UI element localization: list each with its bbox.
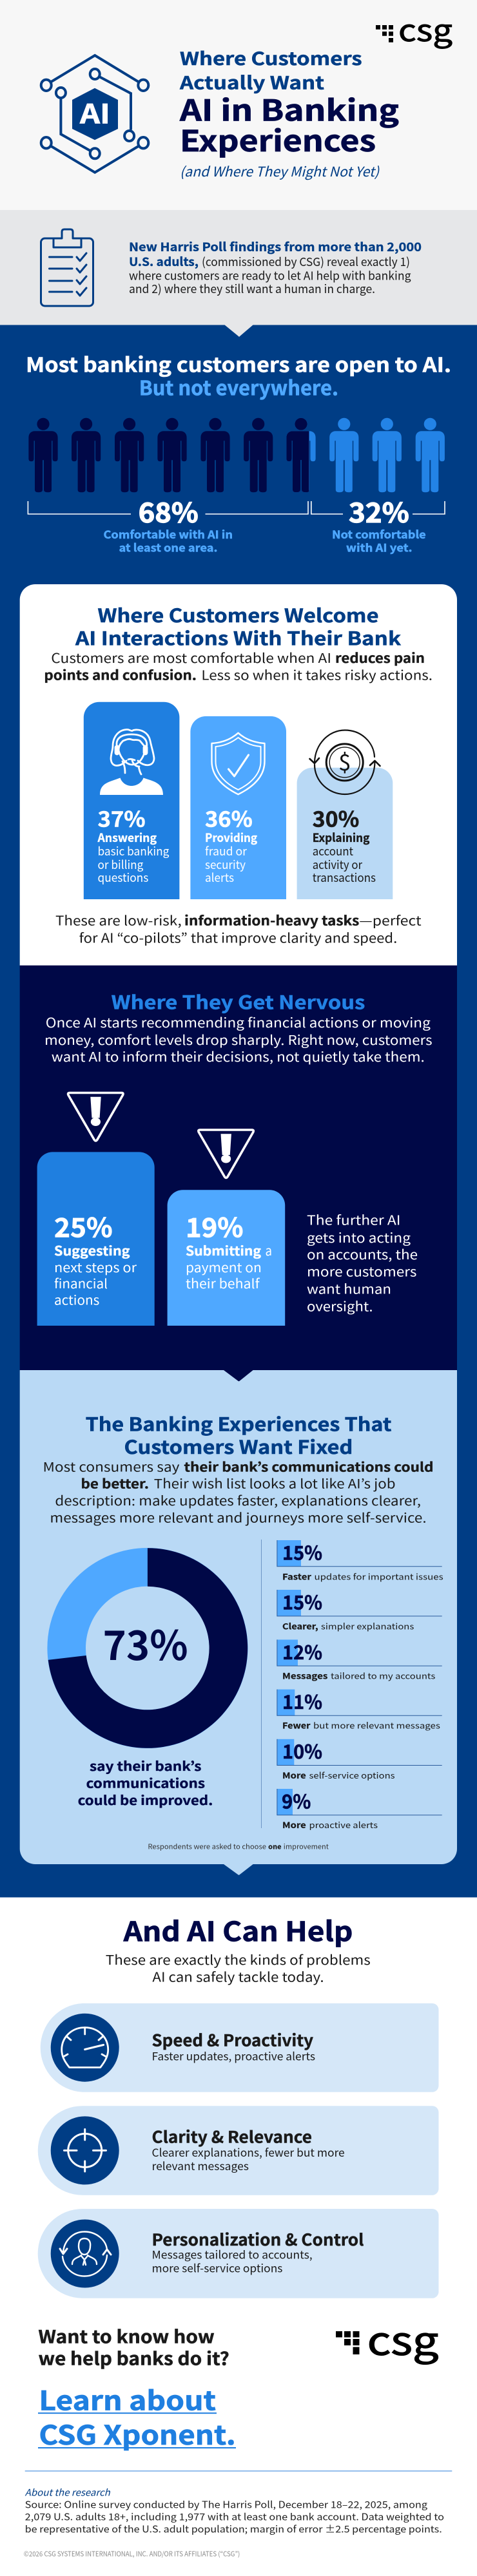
text: nervous intro: money, comfort levels drop sharply. Right now, customers: [44, 1029, 433, 1049]
card: personalization and control: Messages tailored to accounts,: [152, 2246, 313, 2262]
text: further AI: [307, 1209, 418, 1315]
text: fixed intro: their bank’s communications could: [184, 1456, 433, 1475]
text: low-risk tasks: —perfect: [359, 910, 422, 930]
bar: tailored messages: Messages: [282, 1670, 327, 1681]
text: about the research: [25, 2485, 444, 2536]
title: Where Customers: [180, 45, 362, 71]
text: 37 percent: 37%: [98, 802, 146, 833]
bracket: 68 percent: 68%: [139, 491, 199, 531]
text: further AI: oversight.: [307, 1295, 373, 1315]
bar: self-service: [277, 1736, 442, 1781]
text: want to know: we help banks do it?: [39, 2345, 229, 2371]
heading: open to AI: [26, 348, 451, 401]
card: clarity and relevance: Clarity & Relevance: [152, 2125, 312, 2148]
text: 30 percent: activity or: [313, 856, 363, 873]
arrow: bottom notch: [224, 1864, 253, 1875]
bar: faster updates: 15%: [282, 1537, 322, 1565]
card: 25 percent suggesting: next steps or: [54, 1257, 137, 1276]
text: want to know: Want to know how: [39, 2322, 215, 2348]
bar: clearer explanations: Clearer,: [282, 1619, 318, 1632]
text: nervous intro: want AI to inform their decisions, not quietly take them.: [52, 1046, 425, 1065]
bar: fewer messages: but more relevant messages: [313, 1719, 440, 1732]
text: low-risk tasks: These are low-risk,: [55, 910, 182, 930]
text: welcome intro: reduces pain: [335, 647, 425, 667]
card: 19 percent submitting: their behalf: [186, 1274, 260, 1292]
footnote: respondents: improvement: [284, 1842, 329, 1851]
title: Experiences: [180, 118, 376, 160]
panel: experiences customers want fixed: [20, 1370, 457, 1875]
icon: speedometer: [62, 2028, 108, 2068]
heading: fixed: The Banking Experiences That: [86, 1409, 391, 1436]
text: further AI: more customers: [307, 1261, 416, 1281]
card: 25 percent suggesting: financial: [54, 1274, 108, 1292]
heading: fixed: [86, 1409, 391, 1460]
arrow: top notch: [224, 1370, 253, 1381]
bar: proactive alerts: More: [282, 1818, 306, 1831]
section: and AI can help: [38, 1911, 439, 2298]
bracket: 32 percent: [311, 491, 445, 555]
footnote: respondents: [148, 1842, 329, 1851]
link: learn about CSG Xponent: Learn about: [39, 2380, 216, 2418]
text: 36 percent: alerts: [205, 869, 234, 886]
icon: clipboard checklist: [41, 229, 93, 306]
text: fixed intro: be better.: [81, 1473, 149, 1492]
title: [179, 45, 399, 181]
icon: warning triangle two: [199, 1130, 253, 1178]
bar: faster updates: [277, 1537, 443, 1582]
icon: shield check: [211, 733, 264, 794]
icon: AI chip hexagon: AI: [79, 93, 110, 131]
bar: fewer messages: 11%: [282, 1686, 322, 1715]
logo: CSG top: csg: [398, 6, 453, 50]
icon: headset agent: [100, 729, 163, 795]
footnote: respondents: Respondents were asked to choose: [148, 1842, 266, 1851]
text: AI can help intro: [106, 1949, 371, 1986]
card: 30 percent explaining: [297, 730, 393, 899]
chart: 73 percent donut: 73%: [103, 1614, 188, 1672]
text: fixed intro: [43, 1456, 433, 1526]
text: intro: U.S. adults,: [129, 253, 199, 270]
card: 25 percent suggesting: Suggesting: [54, 1241, 130, 1259]
card: personalization and control: [38, 2209, 439, 2298]
text: intro: where customers are ready to let AI help with banking: [129, 267, 411, 283]
text: 30 percent: 30%: [313, 802, 359, 833]
logo: CSG bottom: csg: [367, 2311, 438, 2367]
text: intro: (commissioned by CSG) reveal exactly 1): [202, 253, 410, 270]
heading: welcome: [75, 601, 402, 651]
bar: tailored messages: tailored to my accounts: [331, 1670, 435, 1681]
bar: self-service: More: [282, 1769, 306, 1781]
heading: welcome: AI Interactions With Their Bank: [75, 624, 402, 651]
card: speed and proactivity: [41, 2003, 438, 2092]
icon: AI chip hexagon: [41, 55, 148, 173]
icon: target: [64, 2130, 106, 2171]
text: fixed intro: messages more relevant and journeys more self-service.: [50, 1507, 427, 1526]
text: fixed intro: description: make updates faster, explanations clearer,: [55, 1491, 421, 1509]
text: low-risk tasks: [55, 910, 422, 946]
text: welcome intro: [44, 647, 433, 684]
text: fixed intro: Their wish list looks a lot like AI’s job: [154, 1473, 396, 1492]
card: speed and proactivity: Faster updates, proactive alerts: [152, 2047, 315, 2063]
text: further AI: gets into acting: [307, 1227, 411, 1246]
heading: AI can help: And AI Can Help: [123, 1911, 353, 1949]
card: 19 percent submitting: payment on: [186, 1257, 262, 1276]
bar chart: improvements: [277, 1537, 443, 1831]
text: copyright: ©2026 CSG SYSTEMS INTERNATIONAL, INC. AND/OR ITS AFFILIATES (“CSG”): [24, 2549, 240, 2559]
card: speed and proactivity: Speed & Proactivity: [152, 2028, 314, 2052]
card: clarity and relevance: [38, 2106, 439, 2195]
call to action: [38, 2311, 438, 2452]
card: 36 percent providing: [190, 716, 286, 899]
text: 37 percent: questions: [98, 869, 148, 886]
bar: self-service: 10%: [282, 1736, 322, 1764]
text: welcome intro: Customers are most comfortable when AI: [51, 647, 331, 667]
card: clarity and relevance: relevant messages: [152, 2157, 249, 2173]
bar: clearer explanations: [277, 1587, 442, 1632]
text: nervous intro: Once AI starts recommending financial actions or moving: [46, 1012, 431, 1031]
bar: tailored messages: [277, 1637, 442, 1681]
text: 36 percent: [205, 802, 257, 886]
text: intro: and 2) where they still want a human in charge.: [129, 280, 375, 297]
text: further AI: on accounts, the: [307, 1244, 418, 1263]
text: about the research: Source: Online survey conducted by The Harris Poll, December 18–22, 2025, among: [25, 2497, 428, 2511]
text: AI can help intro: AI can safely tackle today.: [152, 1967, 324, 1986]
card: 19 percent submitting: Submitting: [186, 1241, 261, 1259]
bracket: 68 percent: at least one area.: [119, 539, 217, 555]
text: donut caption: could be improved.: [78, 1790, 213, 1809]
text: want to know: [39, 2322, 229, 2371]
heading: open to AI: But not everywhere.: [139, 372, 338, 401]
logo: CSG bottom: [336, 2311, 438, 2367]
text: 37 percent: Answering: [97, 829, 157, 846]
heading: welcome: Where Customers Welcome: [98, 601, 379, 628]
logo: CSG top: [376, 6, 453, 50]
bar: fewer messages: Fewer: [282, 1719, 311, 1732]
text: 36 percent: Providing: [205, 829, 257, 846]
text: welcome intro: Less so when it takes risky actions.: [201, 665, 433, 684]
card: 25 percent suggesting: [37, 1152, 155, 1326]
text: intro: New Harris Poll findings from more than 2,000: [129, 238, 422, 255]
text: 30 percent: [313, 802, 376, 886]
text: further AI: want human: [307, 1278, 391, 1297]
text: low-risk tasks: information-heavy tasks: [184, 910, 359, 930]
text: further AI: The further AI: [307, 1209, 401, 1228]
link: learn about CSG Xponent: CSG Xponent.: [39, 2414, 236, 2452]
card: 19 percent submitting: [168, 1190, 285, 1326]
title: (and Where They Might Not Yet): [180, 162, 380, 181]
chart: people pictogram: [28, 418, 445, 492]
card: 19 percent submitting: 19%: [186, 1206, 244, 1245]
icon: dollar cycle: [309, 730, 380, 794]
card: 19 percent submitting: a: [266, 1241, 272, 1259]
card: clarity and relevance: Clearer explanations, fewer but more: [152, 2144, 345, 2160]
bracket: 32 percent: with AI yet.: [346, 539, 413, 555]
bracket: 32 percent: 32%: [349, 491, 409, 531]
text: donut caption: [78, 1756, 213, 1809]
card: 25 percent suggesting: actions: [54, 1290, 99, 1308]
main blue section: [0, 325, 477, 1898]
bar: clearer explanations: simpler explanations: [321, 1619, 414, 1632]
panel: where they get nervous: [20, 966, 457, 1371]
text: about the research: be representative of the U.S. adult population; margin of error ±2.5 percentage points.: [25, 2523, 442, 2536]
link: learn about CSG Xponent: [38, 2380, 236, 2452]
text: fixed intro: Most consumers say: [43, 1456, 180, 1475]
bar: self-service: self-service options: [309, 1769, 394, 1781]
card: personalization and control: Personalization & Control: [152, 2228, 364, 2251]
card: personalization and control: more self-service options: [152, 2260, 282, 2276]
text: 36 percent: security: [205, 856, 246, 873]
heading: nervous: Where They Get Nervous: [112, 988, 365, 1015]
text: donut caption: say their bank’s: [90, 1756, 202, 1775]
title: Actually Want: [179, 69, 324, 95]
bracket: 32 percent: Not comfortable: [332, 526, 426, 542]
title: AI in Banking: [179, 88, 399, 129]
text: 36 percent: fraud or: [205, 843, 248, 859]
icon: person cycle: [60, 2231, 111, 2276]
text: low-risk tasks: for AI “co-pilots” that improve clarity and speed.: [79, 927, 397, 946]
text: donut caption: communications: [86, 1773, 205, 1791]
panel: where customers welcome AI: [20, 584, 457, 966]
footnote: respondents: one: [268, 1842, 281, 1851]
text: about the research: 2,079 U.S. adults 18+, including 1,977 with at least one bank account. Data weighted to: [25, 2510, 444, 2524]
arrow: down pointer: [224, 325, 253, 337]
text: AI can help intro: These are exactly the kinds of problems: [106, 1949, 371, 1969]
bar: tailored messages: 12%: [282, 1637, 322, 1665]
card: 37 percent answering: [84, 702, 179, 899]
icon: warning triangle one: [68, 1092, 123, 1141]
text: intro: [129, 238, 422, 297]
text: 30 percent: account: [313, 843, 353, 859]
chart: 73 percent donut: [48, 1548, 248, 1748]
text: 36 percent: 36%: [205, 802, 253, 833]
text: nervous intro: [44, 1012, 433, 1065]
heading: open to AI: Most banking customers are open to AI.: [26, 348, 451, 377]
text: about the research: About the research: [25, 2485, 111, 2499]
bracket: 68 percent: [28, 491, 308, 555]
bar: faster updates: Faster: [282, 1570, 311, 1582]
icon: dollar cycle: $: [338, 745, 351, 778]
bar: clearer explanations: 15%: [282, 1587, 322, 1616]
bar: proactive alerts: 9%: [282, 1786, 311, 1814]
intro band: [0, 210, 477, 325]
text: 37 percent: or billing: [98, 856, 143, 873]
bar: faster updates: updates for important issues: [315, 1570, 443, 1582]
card: 25 percent suggesting: 25%: [54, 1206, 113, 1245]
heading: fixed: Customers Want Fixed: [124, 1433, 353, 1460]
bar: proactive alerts: proactive alerts: [309, 1818, 378, 1831]
text: 30 percent: transactions: [313, 869, 376, 886]
header panel: [0, 0, 477, 210]
bracket: 68 percent: Comfortable with AI in: [103, 526, 233, 542]
text: welcome intro: points and confusion.: [44, 665, 197, 684]
text: 37 percent: [97, 802, 169, 886]
text: 30 percent: Explaining: [313, 829, 370, 846]
bar: fewer messages: [277, 1686, 442, 1732]
bar: proactive alerts: [277, 1786, 442, 1831]
text: 37 percent: basic banking: [98, 843, 169, 859]
